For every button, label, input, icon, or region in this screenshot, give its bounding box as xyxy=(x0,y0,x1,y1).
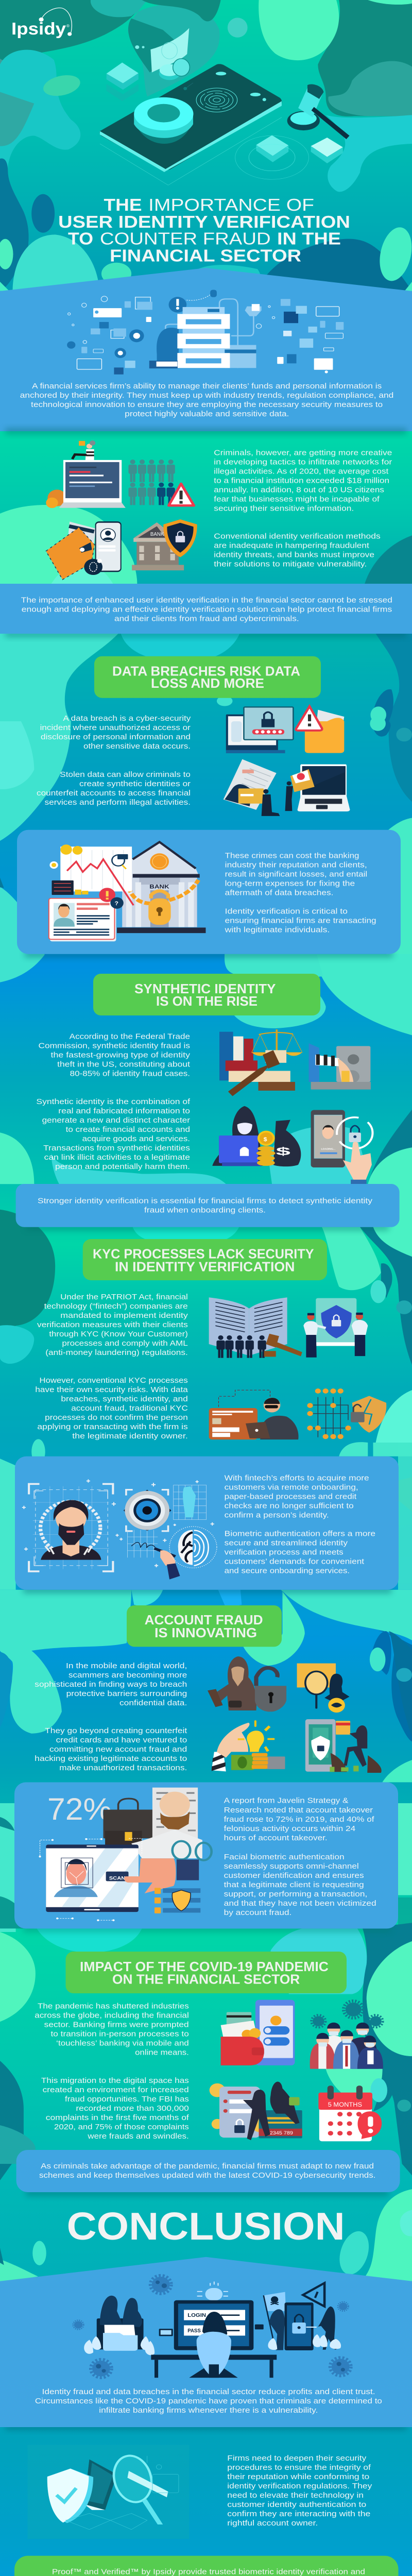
pandemic text: ‘touchless’ banking via mobile and xyxy=(56,2039,189,2048)
heading: data breaches: LOSS AND MORE xyxy=(151,675,264,691)
illustration: hacker with laptop, money bag, phone face scan: $ xyxy=(264,1137,267,1143)
data breach text: other sensitive data occurs. xyxy=(83,742,191,751)
migration text: complaints in the first five months of xyxy=(46,2113,190,2122)
illustration: cyber criminals and woman at login computer: LOGIN xyxy=(187,2312,206,2318)
synthetic identity text xyxy=(36,1097,191,1171)
illustration: laptop breach, warning and folder xyxy=(224,706,350,816)
illustration: falling chart, chained bank and ID card: ? xyxy=(114,901,118,907)
green section text: conventional methods: their solutions to mitigate vulnerability. xyxy=(214,560,367,569)
conclusion text: Circumstances like the COVID-19 pandemic have proven that criminals are determined to xyxy=(35,2397,382,2405)
firms text xyxy=(227,2454,372,2528)
logo: Ipsidy: Ipsidy xyxy=(11,19,66,38)
panel text: paper-based processes and credit xyxy=(225,1493,357,1501)
heading: synthetic identity: SYNTHETIC IDENTITY xyxy=(134,981,276,996)
stolen data text: create synthetic identities or xyxy=(79,779,191,788)
panel text: and secure onboarding services. xyxy=(225,1567,350,1575)
panel shadow under band xyxy=(5,632,407,637)
migration text: 2020, and 75% of those complaints xyxy=(54,2123,189,2131)
panel text xyxy=(224,1797,376,1917)
conclusion text: infiltrate banking firms whenever there is a vulnerability. xyxy=(99,2406,318,2415)
background blobs: account fraud section xyxy=(0,1439,412,1782)
firms text: customer identity authentication to xyxy=(227,2500,366,2509)
green section text: criminals xyxy=(214,448,392,513)
logo: Ipsidy: ® xyxy=(66,24,70,28)
background blobs: data breach and synthetic identity sections xyxy=(0,634,412,1035)
migration text: recorded more than 300,000 xyxy=(76,2104,189,2113)
synthetic identity text: acquire goods and services. xyxy=(82,1134,190,1143)
hero background blobs xyxy=(0,0,412,292)
illustration: shield, laptop and magnifier security scene xyxy=(28,2445,189,2539)
panel: conclusion summary xyxy=(0,2257,412,2430)
synthetic identity text: Synthetic identity is the combination of xyxy=(36,1097,191,1106)
migration text: This migration to the digital space has xyxy=(41,2076,189,2085)
synthetic identity text: person and potentially harm them. xyxy=(55,1162,190,1171)
synthetic identity text: real and fabricated information to xyxy=(58,1107,190,1115)
pandemic text: The pandemic has shuttered industries xyxy=(38,2002,189,2011)
panel text: and that they have not been victimized xyxy=(224,1899,376,1908)
illustration: hacker with laptop, money bag, phone face scan: LOADING... xyxy=(321,1148,335,1151)
panel text: These crimes can cost the banking xyxy=(225,852,359,860)
heading: KYC: KYC PROCESSES LACK SECURITY xyxy=(93,1246,314,1261)
panel text: by account fraud. xyxy=(224,1908,291,1917)
heading: covid impact: IMPACT OF THE COVID-19 PANDEMIC xyxy=(80,1959,329,1974)
green section background xyxy=(0,431,412,584)
panel text: Biometric authentication offers a more xyxy=(225,1530,375,1538)
background blobs: conclusion section xyxy=(0,2164,412,2282)
data breach text: disclosure of personal information and xyxy=(41,733,191,741)
conclusion text: Identity fraud and data breaches in the financial sector reduce profits and client trust. xyxy=(42,2387,375,2396)
panel shadow under intro xyxy=(5,429,407,434)
PATRIOT Act text: verification measures with their clients xyxy=(37,1320,188,1329)
illustration: hackers at phone login and payment card xyxy=(210,2082,302,2140)
hero background xyxy=(0,0,412,309)
panel text: result in significant losses, and entail xyxy=(225,870,367,879)
main page background xyxy=(0,634,412,2576)
panel text: support, or performing a transaction, xyxy=(224,1890,367,1899)
green section text: conventional methods: are inadequate in hampering fraudulent xyxy=(214,541,370,550)
migration text: fraud opportunities. The FBI has xyxy=(65,2095,189,2104)
conventional KYC text: processes do not confirm the person xyxy=(45,1413,188,1422)
banner: stronger verification: fraud when onboarding clients. xyxy=(144,1206,266,1215)
heading: account fraud xyxy=(127,1605,282,1647)
pandemic text: to transition in-person processes to xyxy=(50,2030,189,2039)
scammers text: In the mobile and digital world, xyxy=(66,1662,187,1670)
illustration: masked business people and viruses xyxy=(310,2001,383,2069)
banner: adapt to new fraud schemes: schemes and keep themselves updated with the latest COVID-19 cybersecurity trends. xyxy=(39,2171,376,2180)
FTC text: theft in the US, constituting about xyxy=(57,1060,191,1069)
illustration: law books, gavel and safe being robbed xyxy=(219,1029,371,1096)
panel text: Research noted that account takeover xyxy=(224,1806,373,1815)
green section text: criminals: securing their sensitive information. xyxy=(214,504,354,513)
panel text: Identity verification is critical to xyxy=(225,907,348,916)
panel text: verification process and meets xyxy=(225,1548,344,1557)
migration text xyxy=(41,2076,190,2141)
synthetic identity text: to create financial accounts and xyxy=(66,1125,190,1134)
band: importance statement xyxy=(0,584,412,634)
background blobs: KYC section xyxy=(0,1110,412,1443)
scammers text: scammers are becoming more xyxy=(68,1671,187,1680)
illustration: cyber criminals and woman at login computer xyxy=(73,2276,351,2378)
FTC text xyxy=(38,1032,191,1078)
illustration: smartphone with fingerprint, gavel, cash and tiles xyxy=(100,28,350,185)
firms text: identity verification regulations. They xyxy=(227,2482,372,2490)
green section text: criminals: annually. In addition, 8 out of 10 US citizens xyxy=(214,485,384,495)
pandemic text: sector. Banking firms were prompted xyxy=(44,2021,189,2029)
illustration: cyber criminals and woman at login computer: PASS xyxy=(187,2328,201,2334)
panel text: customers’ demands for convenient xyxy=(225,1557,365,1566)
scammers text: sophisticated in finding ways to breach xyxy=(35,1680,187,1689)
intro text: protect highly valuable and sensitive data. xyxy=(125,410,289,418)
green section text: criminals: illegal activities. As of 2020, the average cost xyxy=(214,467,389,476)
scammers text: protective barriers surrounding xyxy=(66,1689,187,1698)
illustration: hacker with laptop, money bag, phone face scan: $ xyxy=(276,1145,290,1158)
illustration: credit card fraudster and broken circuit shield xyxy=(209,1388,386,1439)
stolen data text: services and perform illegal activities. xyxy=(45,798,191,807)
data breach text xyxy=(40,714,191,751)
intro text: A financial services firm’s ability to manage their clients’ funds and personal information is xyxy=(32,382,382,391)
heading: covid impact xyxy=(66,1952,347,1993)
pandemic text: online means. xyxy=(135,2048,189,2057)
hero title: IN THE xyxy=(277,229,341,248)
panel text: confirm a person’s identity. xyxy=(225,1511,329,1520)
synthetic identity text: can link illicit activities to a legitimate xyxy=(44,1153,190,1162)
migration text: were frauds and swindles. xyxy=(87,2132,189,2141)
conventional KYC text xyxy=(35,1376,188,1440)
conclusion text xyxy=(35,2387,382,2415)
conventional KYC text: the legitimate identity owner. xyxy=(72,1432,188,1440)
hero title: IMPORTANCE OF xyxy=(148,195,314,214)
illustration: hooded scammer, padlock, magnifier and silhouette xyxy=(208,1656,350,1713)
counterfeit text xyxy=(35,1726,187,1772)
intro panel xyxy=(0,268,412,431)
callout: Proof and Verified xyxy=(14,2556,399,2576)
conventional KYC text: breaches, synthetic identity, and xyxy=(61,1395,188,1403)
panel: biometric authentication xyxy=(15,1456,399,1593)
hero title: FINANCIAL SECTOR xyxy=(110,246,301,265)
panel text: seamlessly supports omni-channel xyxy=(224,1862,359,1871)
panel text: industry their reputation and clients, xyxy=(225,861,367,870)
scammers text xyxy=(35,1662,187,1707)
illustration: calendar showing 5 months xyxy=(318,2086,382,2141)
intro text xyxy=(20,382,393,418)
green section blobs xyxy=(0,505,412,584)
conventional KYC text: applying or transacting with the firm is xyxy=(37,1422,188,1431)
panel text: aftermath of data breaches. xyxy=(225,889,333,897)
green section text: criminals: Criminals, however, are getting more creative xyxy=(214,448,392,457)
data breach text: incident where unauthorized access or xyxy=(40,723,191,732)
data breach text: A data breach is a cyber-security xyxy=(63,714,191,723)
panel text: that a legitimate client is requesting xyxy=(224,1880,364,1889)
green section text: conventional methods xyxy=(214,532,381,569)
stat: 72%: 72% xyxy=(47,1792,112,1826)
panel text: long-term expenses for fixing the xyxy=(225,879,355,888)
illustration: briefcase, mugshot, handcuffs, hand scanning face on tablet xyxy=(39,1788,212,1921)
illustration: open law book, people, gavel, officers and shield xyxy=(209,1297,368,1358)
PATRIOT Act text: technology (“fintech”) companies are xyxy=(44,1302,188,1311)
stolen data text: counterfeit accounts to access financial xyxy=(37,789,191,798)
panel: cost of crimes xyxy=(17,830,401,957)
illustration: hand with light bulb, cash and thief at phone xyxy=(212,1719,382,1773)
conventional KYC text: However, conventional KYC processes xyxy=(39,1376,188,1385)
illustration: thief on laptop with crowd and warning sign xyxy=(46,440,194,508)
scammers text: confidential data. xyxy=(119,1699,187,1707)
green section text: conventional methods: identity threats, and banks must improve xyxy=(214,550,374,560)
FTC text: According to the Federal Trade xyxy=(70,1032,190,1041)
counterfeit text: credit cards and have ventured to xyxy=(56,1736,187,1744)
panel: account takeover report xyxy=(14,1782,398,1932)
FTC text: the fastest-growing type of identity xyxy=(50,1051,191,1059)
PATRIOT Act text: (anti-money laundering) regulations. xyxy=(45,1348,188,1357)
heading: data breaches xyxy=(94,656,321,698)
migration text: created an environment for increased xyxy=(43,2086,189,2094)
counterfeit text: They go beyond creating counterfeit xyxy=(45,1726,187,1735)
panel text: hours of account takeover. xyxy=(224,1834,328,1842)
heading: KYC: IN IDENTITY VERIFICATION xyxy=(115,1259,295,1274)
band: importance statement: and their clients from fraud and cybercriminals. xyxy=(114,615,299,623)
heading: covid impact: ON THE FINANCIAL SECTOR xyxy=(112,1971,300,1987)
heading: synthetic identity xyxy=(93,974,320,1015)
illustration: falling chart, chained bank and ID card xyxy=(49,841,205,941)
panel text: ensuring financial firms are transacting xyxy=(225,917,376,925)
background blobs: covid section xyxy=(0,1803,412,2164)
panel text: felonious activity occurs within 24 xyxy=(224,1824,355,1833)
heading: account fraud: ACCOUNT FRAUD xyxy=(145,1612,263,1628)
heading: synthetic identity: IS ON THE RISE xyxy=(156,993,258,1009)
heading: account fraud: IS INNOVATING xyxy=(154,1625,257,1640)
illustration: data server with security icons xyxy=(67,290,344,375)
banner: adapt to new fraud schemes xyxy=(16,2150,400,2196)
firms text: Firms need to deepen their security xyxy=(227,2454,367,2463)
PATRIOT Act text: mandated to implement identity xyxy=(60,1311,188,1320)
counterfeit text: committing new account fraud and xyxy=(49,1745,187,1754)
counterfeit text: make unauthorized transactions. xyxy=(59,1764,187,1772)
illustration: wallet, phone, bank and shield xyxy=(46,519,197,580)
FTC text: 80-85% of identity fraud cases. xyxy=(70,1070,190,1078)
band: importance statement: The importance of enhanced user identity verification in the financial sector cannot be stressed xyxy=(21,596,392,605)
panel text: fraud rose to 72% in 2019, and 40% of xyxy=(224,1815,374,1824)
green section text: criminals: to a financial institution exceeded $18 million xyxy=(214,476,389,485)
hero title: USER IDENTITY VERIFICATION xyxy=(58,212,350,231)
intro text: anchored by their integrity. They must keep up with industry trends, regulation compliance, and xyxy=(20,391,393,400)
conventional KYC text: have their own security risks. With data xyxy=(35,1385,188,1394)
panel text: A report from Javelin Strategy & xyxy=(224,1797,348,1805)
hero title: TO xyxy=(68,229,93,248)
pandemic text xyxy=(35,2002,189,2057)
illustration: wallet, phone, bank and shield: BANK xyxy=(150,532,164,537)
illustration: briefcase, mugshot, handcuffs, hand scanning face on tablet: SCAN xyxy=(109,1876,125,1881)
panel text: checks are no longer sufficient to xyxy=(225,1502,354,1511)
FTC text: Commission, synthetic identity fraud is xyxy=(38,1042,190,1050)
heading: data breaches: DATA BREACHES RISK DATA xyxy=(112,664,300,679)
firms text: procedures to ensure the integrity of xyxy=(227,2463,371,2472)
intro text: technological innovation to ensure they are employing the necessary security measures to xyxy=(31,400,383,409)
illustration: hacker with laptop, money bag, phone face scan xyxy=(212,1106,372,1184)
PATRIOT Act text: Under the PATRIOT Act, financial xyxy=(60,1293,188,1301)
hero title xyxy=(58,195,350,265)
stolen data text xyxy=(37,770,191,807)
panel text: With fintech’s efforts to acquire more xyxy=(225,1474,369,1483)
hero title: THE xyxy=(104,195,142,214)
illustration: wallet and mobile banking phone xyxy=(221,2000,295,2065)
panel text: Facial biometric authentication xyxy=(224,1853,345,1861)
panel text xyxy=(225,852,376,935)
panel text: customers via remote onboarding, xyxy=(225,1483,358,1492)
conventional KYC text: account fraud, traditional KYC xyxy=(71,1404,188,1413)
illustration: calendar showing 5 months: 5 MONTHS xyxy=(328,2102,362,2108)
band: importance statement: enough and deploying an effective identity verification solution can help protect financial firms xyxy=(22,605,392,614)
banner: stronger verification: Stronger identity verification is essential for financial firms to detect synthetic identity xyxy=(38,1197,373,1206)
panel text: secure and streamlined identity xyxy=(225,1539,348,1548)
pandemic text: across the globe, including the financial xyxy=(35,2011,189,2020)
green section text: conventional methods: Conventional identity verification methods xyxy=(214,532,381,541)
logo: Ipsidy xyxy=(11,8,72,38)
illustration: falling chart, chained bank and ID card: BANK xyxy=(149,884,169,890)
firms text: confirm they are interacting with the xyxy=(227,2510,370,2518)
firms text: their reputation while conforming to xyxy=(227,2472,369,2481)
heading: conclusion: CONCLUSION xyxy=(67,2205,345,2248)
green section text: criminals: in developing tactics to infiltrate networks for xyxy=(214,457,392,467)
banner: stronger verification xyxy=(16,1184,400,1227)
firms text: need to elevate their technology in xyxy=(227,2491,364,2500)
green section text: criminals: fear that businesses might be incapable of xyxy=(214,495,380,504)
panel shadow under banner xyxy=(26,1224,389,1230)
synthetic identity text: generate a new and distinct character xyxy=(42,1116,190,1125)
PATRIOT Act text xyxy=(37,1293,188,1357)
banner: adapt to new fraud schemes: As criminals take advantage of the pandemic, financial firms must adapt to new fraud xyxy=(41,2162,374,2171)
panel text: with legitimate individuals. xyxy=(225,926,330,935)
stolen data text: Stolen data can allow criminals to xyxy=(60,770,191,779)
illustration: biometric face, iris, hand, signature and fingerprint scans xyxy=(22,1479,217,1580)
hero title: COUNTER FRAUD xyxy=(100,229,271,248)
PATRIOT Act text: processes and comply with AML xyxy=(62,1339,188,1348)
panel text xyxy=(225,1474,375,1575)
counterfeit text: hacking existing legitimate accounts to xyxy=(35,1754,187,1763)
illustration: hackers at phone login and payment card: 12345 789 xyxy=(267,2130,293,2136)
PATRIOT Act text: through KYC (Know Your Customer) xyxy=(49,1330,188,1338)
firms text: rightful account owner. xyxy=(227,2519,318,2528)
panel text: customer identification and ensures xyxy=(224,1871,364,1880)
heading: KYC xyxy=(83,1239,327,1280)
synthetic identity text: Transactions from synthetic identities xyxy=(43,1144,190,1153)
